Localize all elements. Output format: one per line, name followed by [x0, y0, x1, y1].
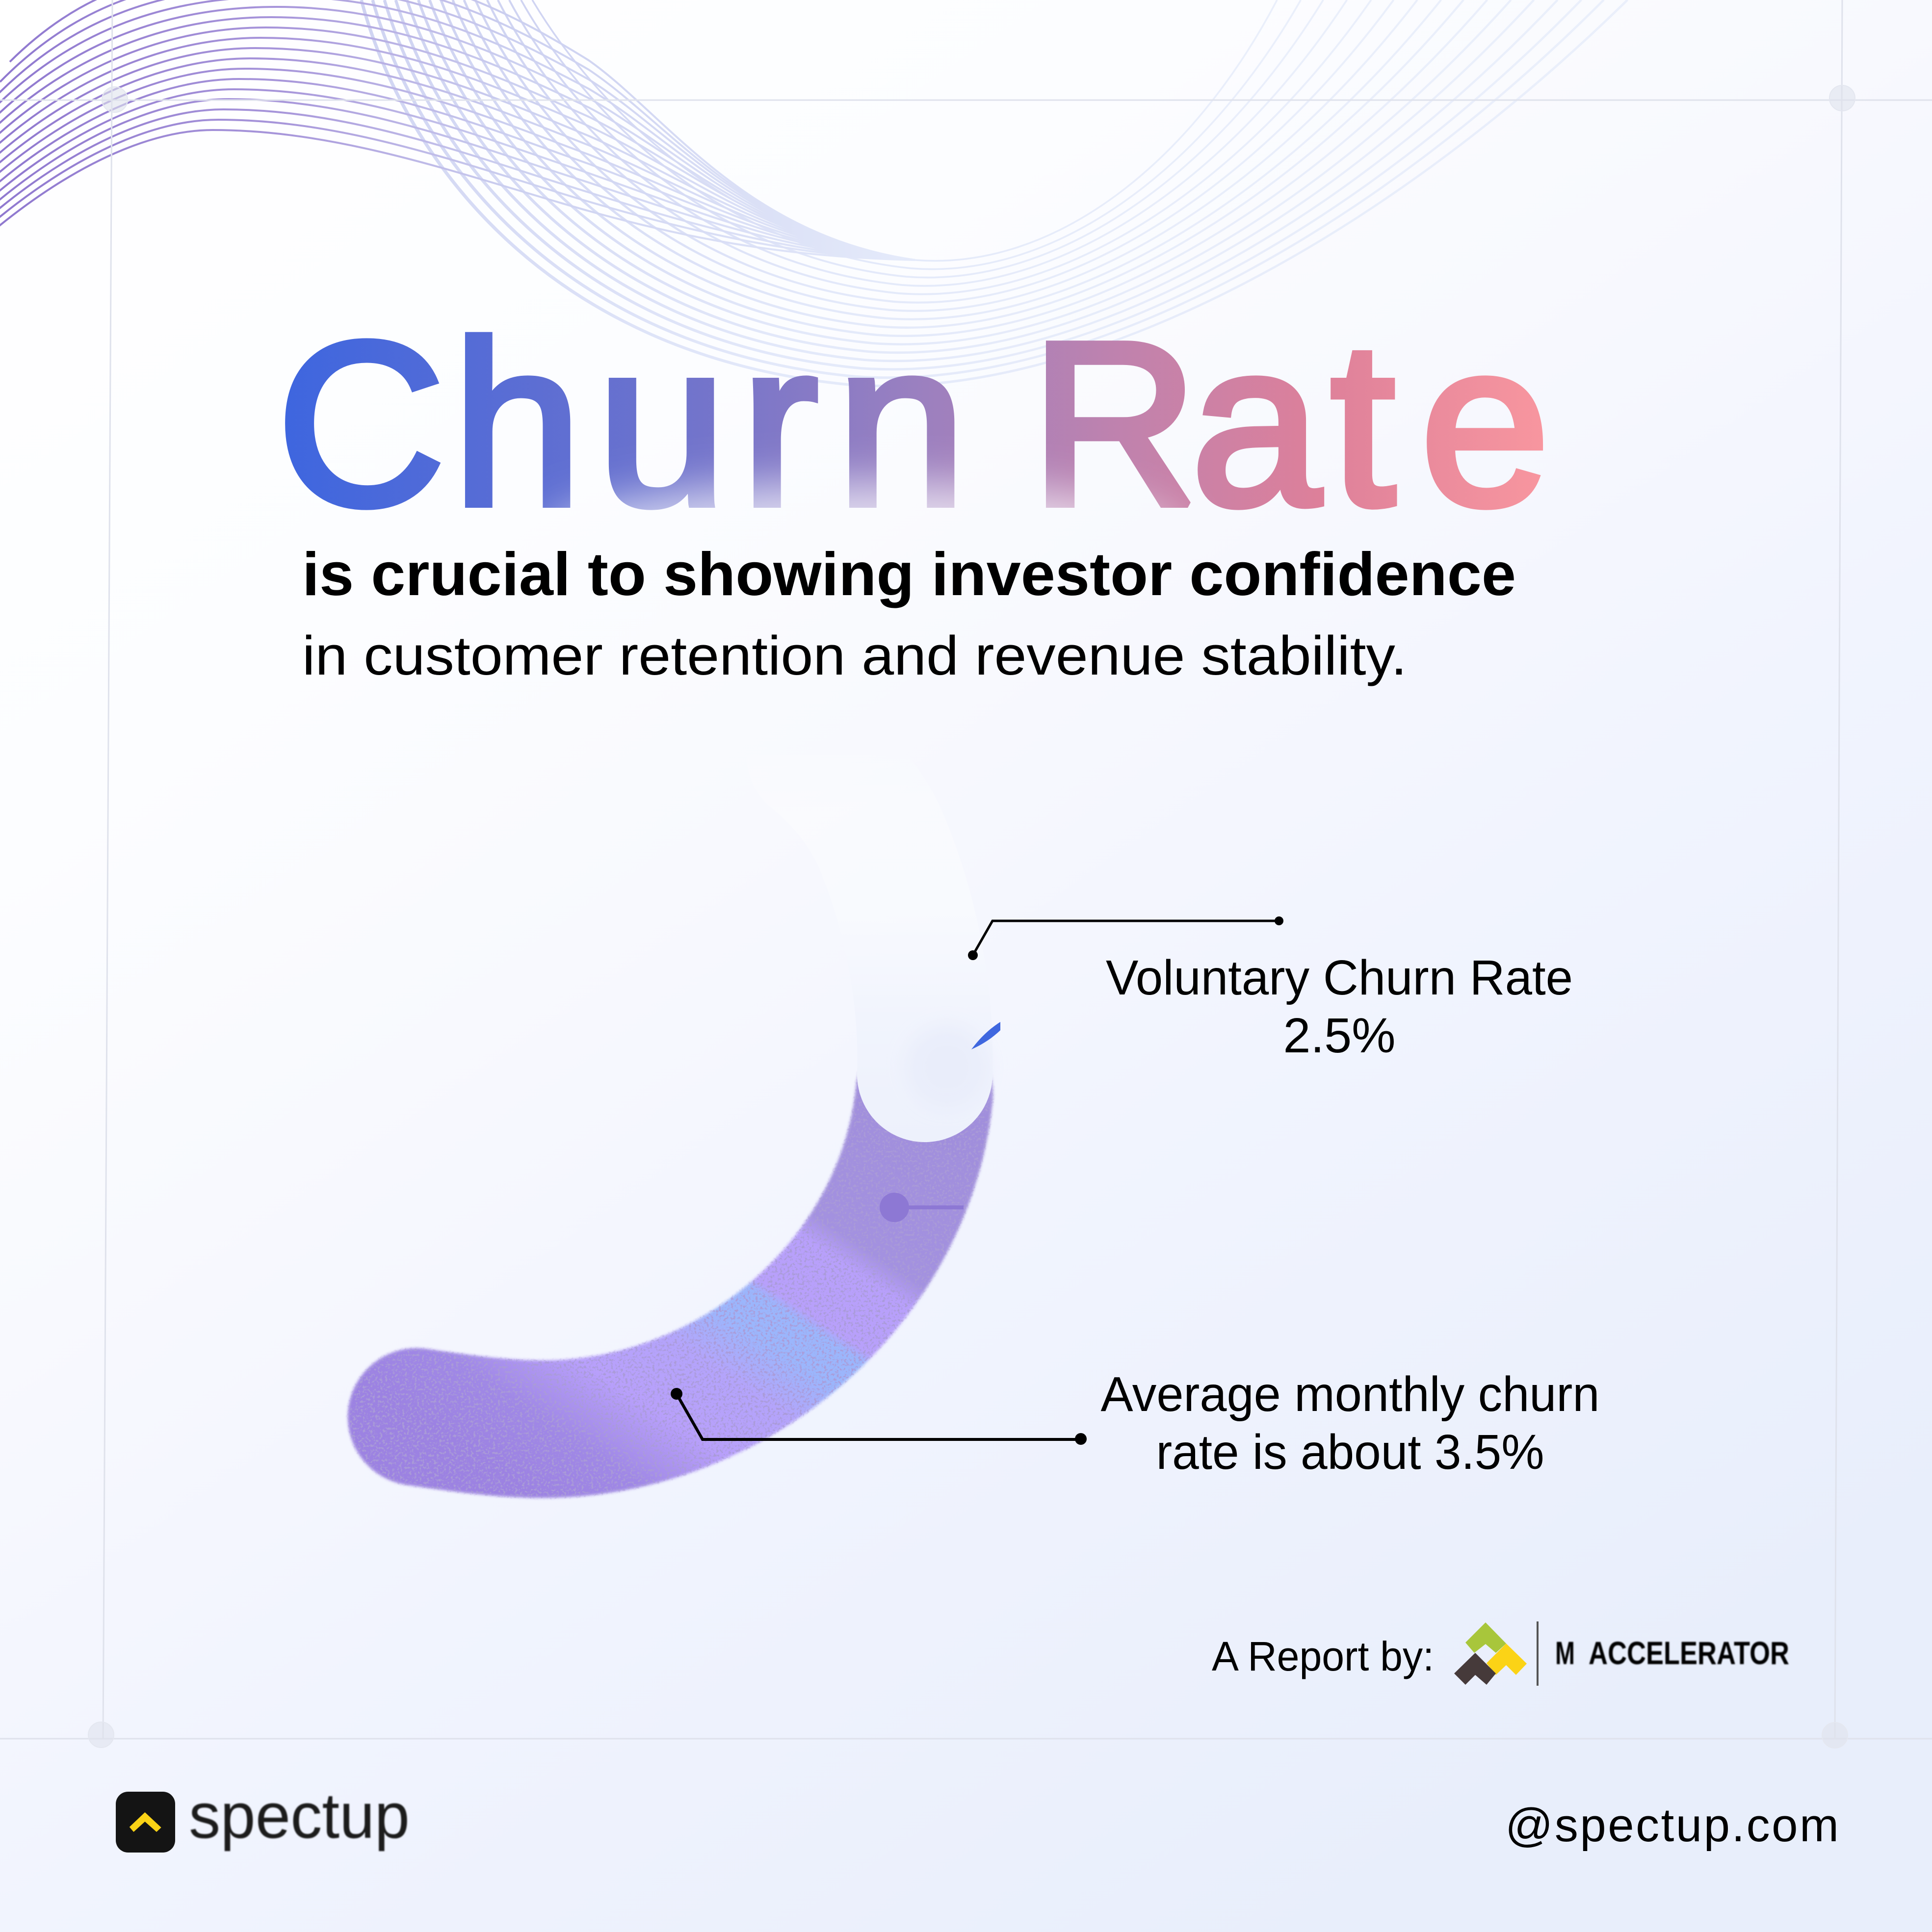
report by label: A Report by: — [1212, 1633, 1434, 1679]
icon: spectup logo — [116, 1792, 175, 1853]
frame corner dots — [88, 85, 1855, 1748]
M Accelerator wordmark: M — [1555, 1635, 1575, 1671]
wave lines: purple arches — [0, 0, 915, 383]
callout text: voluntary churn: Voluntary Churn Rate — [1106, 950, 1573, 1005]
callout text: average churn — [1101, 1367, 1599, 1480]
callout text: average churn: Average monthly churn — [1101, 1367, 1599, 1422]
website handle: @spectup.com — [1505, 1799, 1839, 1852]
arc: pale band highlight — [905, 1025, 989, 1109]
spectup wordmark: spectup — [189, 1779, 410, 1852]
M Accelerator wordmark: ACCELERATOR — [1589, 1635, 1789, 1671]
subtitle regular: in customer retention and revenue stability. — [302, 625, 1407, 686]
callout text: voluntary churn — [1106, 950, 1573, 1063]
callout line: average churn — [671, 1388, 1087, 1445]
title: Churn Rate — [277, 293, 1550, 554]
arc: inner marker dot — [880, 1193, 964, 1222]
callout line: voluntary churn — [968, 916, 1283, 960]
arc: pale upper band — [814, 756, 925, 1074]
arc: coloured band — [417, 1094, 924, 1429]
callout text: average churn: rate is about 3.5% — [1156, 1425, 1544, 1480]
wave lines: steep fan — [200, 0, 1627, 386]
callout text: voluntary churn: 2.5% — [1283, 1008, 1395, 1063]
logo divider — [1537, 1621, 1539, 1686]
arc: blue sliver — [971, 1022, 1000, 1049]
icon: M Accelerator mark — [1454, 1622, 1527, 1685]
subtitle bold: is crucial to showing investor confidence — [302, 541, 1516, 608]
chart: churn arc — [417, 756, 1000, 1429]
